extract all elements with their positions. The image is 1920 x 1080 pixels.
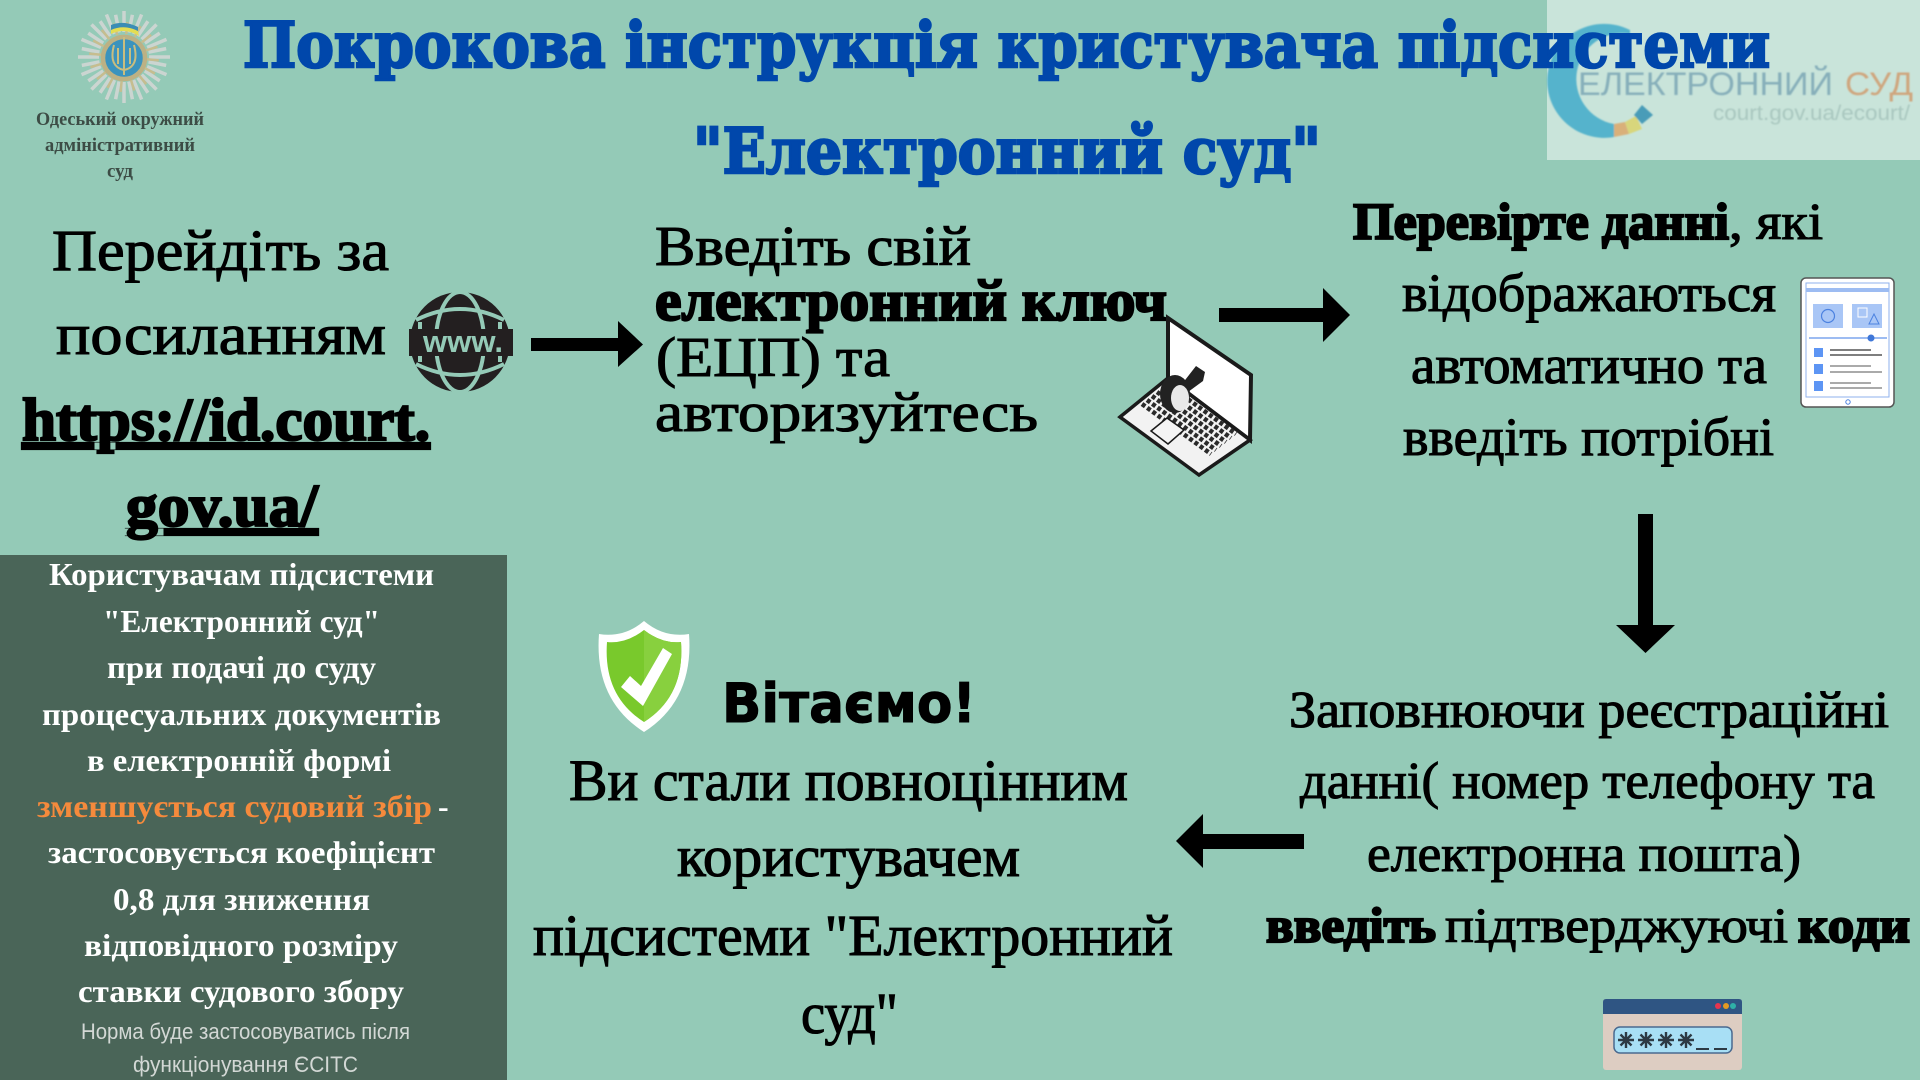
- title: Покрокова інструкція кристувача підсистеми: [243, 8, 1770, 82]
- step 4: fill in registration data: [1266, 682, 1910, 953]
- step 4: fill in registration data: підтверджуючі: [1445, 897, 1788, 953]
- panel: court fee note: ставки судового збору: [78, 973, 404, 1009]
- step 5: final message: [533, 748, 1173, 1046]
- step 4: fill in registration data: введіть: [1266, 897, 1436, 953]
- panel: court fee note: -: [438, 788, 449, 824]
- icon: globe www: [409, 292, 513, 392]
- step 2: enter key: Введіть свій: [655, 216, 971, 278]
- step 3: check data: [1353, 194, 1823, 467]
- logo: Електронний суд: ЕЛЕКТРОННИЙ: [1578, 66, 1833, 102]
- step 5: final message: підсистеми "Електронний: [533, 903, 1173, 968]
- step 1: follow the link: https://id.court.: [22, 387, 430, 453]
- panel: court fee note: процесуальних документів: [42, 696, 441, 732]
- panel: court fee note: 0,8 для зниження: [113, 881, 370, 917]
- heading: congratulations: Вітаємо!: [722, 672, 976, 735]
- icon: laptop with key: [1120, 318, 1251, 475]
- step 1: follow the link: [22, 218, 430, 539]
- step 2: enter key: авторизуйтесь: [655, 382, 1038, 444]
- step 2: enter key: електронний ключ: [655, 268, 1167, 333]
- panel: court fee note: Норма буде застосовуватись після: [81, 1019, 410, 1044]
- step 4: fill in registration data: коди: [1798, 897, 1910, 953]
- step 3: check data: , які: [1729, 194, 1823, 251]
- step 4: fill in registration data: данні( номер телефону та: [1300, 753, 1875, 810]
- arrow: step 2 to step 3: [1219, 288, 1350, 342]
- panel: court fee note: зменшується судовий збір: [37, 788, 432, 824]
- court name: суд: [107, 161, 133, 182]
- step 1: follow the link: Перейдіть за: [52, 218, 389, 283]
- title: "Електронний суд": [693, 114, 1321, 188]
- court name: [36, 109, 204, 182]
- step 5: final message: суд": [801, 981, 898, 1046]
- icon: tablet form: [1801, 278, 1894, 407]
- step 1: follow the link: gov.ua/: [126, 473, 319, 539]
- icon: green shield: [599, 621, 689, 732]
- icon: court emblem: [78, 11, 170, 103]
- panel: court fee note: Користувачам підсистеми: [49, 556, 434, 592]
- panel: court fee note: при подачі до суду: [107, 649, 376, 685]
- logo: Електронний суд: СУД: [1845, 66, 1913, 102]
- court name: адміністративний: [45, 135, 195, 156]
- logo: Електронний суд: court.gov.ua/ecourt/: [1713, 102, 1910, 125]
- panel: court fee note: функціонування ЄСІТС: [133, 1052, 358, 1077]
- step 3: check data: введіть потрібні: [1403, 407, 1774, 467]
- panel: court fee note: відповідного розміру: [84, 927, 398, 963]
- arrow: step 3 to step 4: [1616, 514, 1675, 653]
- panel: court fee note: застосовується коефіцієнт: [48, 834, 435, 870]
- step 3: check data: автоматично та: [1411, 335, 1767, 395]
- step 2: enter key: [655, 216, 1167, 444]
- arrow: step 1 to step 2: [531, 321, 643, 367]
- panel: court fee note: [0, 555, 507, 1080]
- step 3: check data: відображаються: [1402, 263, 1776, 323]
- title: [243, 8, 1770, 188]
- panel: court fee note: "Електронний суд": [103, 603, 380, 639]
- step 4: fill in registration data: електронна пошта): [1367, 826, 1801, 883]
- step 5: final message: користувачем: [677, 824, 1020, 889]
- step 5: final message: Ви стали повноцінним: [569, 748, 1128, 813]
- court name: Одеський окружний: [36, 109, 204, 130]
- step 4: fill in registration data: Заповнюючи реєстраційні: [1289, 682, 1889, 739]
- icon: globe www: www.: [422, 324, 503, 359]
- arrow: step 4 to step 5: [1176, 814, 1304, 868]
- panel: court fee note: в електронній формі: [87, 742, 391, 778]
- step 1: follow the link: посиланням: [56, 302, 386, 367]
- icon: password window: [1603, 999, 1742, 1070]
- logo: Електронний суд: [1547, 0, 1920, 160]
- step 3: check data: Перевірте данні: [1353, 194, 1729, 251]
- step 2: enter key: (ЕЦП) та: [656, 327, 890, 389]
